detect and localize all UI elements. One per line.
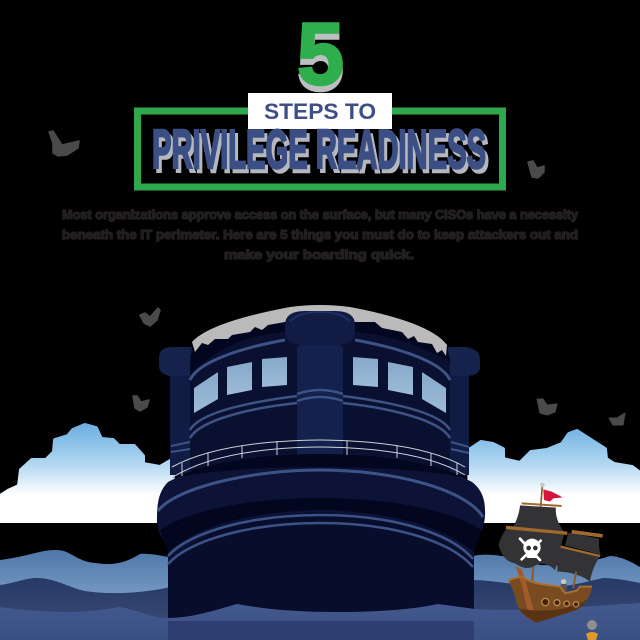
skull and crossbones [520,539,541,560]
roof snow [192,305,447,356]
bird right upper [537,399,557,415]
sea: middle wave [0,578,640,640]
title frame [138,111,502,187]
title label box: steps to [248,93,392,129]
title number 5: 5 [297,10,344,109]
lower hull [157,454,485,625]
deck stripes [190,340,450,438]
intro paragraph: make your boarding quick. [224,248,414,262]
railing [172,440,465,477]
flag [540,483,563,507]
bird top right [528,161,544,178]
bird far right [609,413,625,425]
yards [506,503,603,556]
title label box: steps to: STEPS TO [264,99,376,124]
hull [508,566,592,623]
windows [194,357,446,413]
side turret left [159,347,192,475]
intro paragraph [62,208,578,262]
sea: front wave [0,603,640,640]
main lower sail [499,529,564,570]
pirate ship [499,483,603,623]
upper deck body [190,322,450,470]
bird above tower [140,308,160,326]
bird top left [49,131,79,156]
portholes [542,598,579,607]
water shadow at tower base [168,621,474,640]
bird left of tower [133,396,149,411]
side turret right [448,347,480,475]
lower body [168,512,474,625]
center column [297,345,343,460]
sea: back wave [0,550,640,640]
tower [157,305,485,625]
second mast sails [557,533,601,582]
main upper sail [513,505,564,532]
title number 5: 5 [297,4,344,103]
hull waist shadow [160,498,482,552]
cloud right [469,431,640,521]
hull stripes [158,470,483,567]
center cap [285,311,355,345]
dark roof underside [190,316,450,375]
sailor [561,579,567,592]
dark deck shadow [172,454,468,478]
masts [532,567,576,588]
intro paragraph: Most organizations approve access on the surface, but many CISOs have a necessity [62,208,578,222]
intro paragraph: beneath the IT perimeter. Here are 5 things you must do to keep attackers out and [62,228,578,242]
title: privilege readiness [152,118,489,184]
cloud left [0,425,175,521]
small figure in water [586,620,598,640]
